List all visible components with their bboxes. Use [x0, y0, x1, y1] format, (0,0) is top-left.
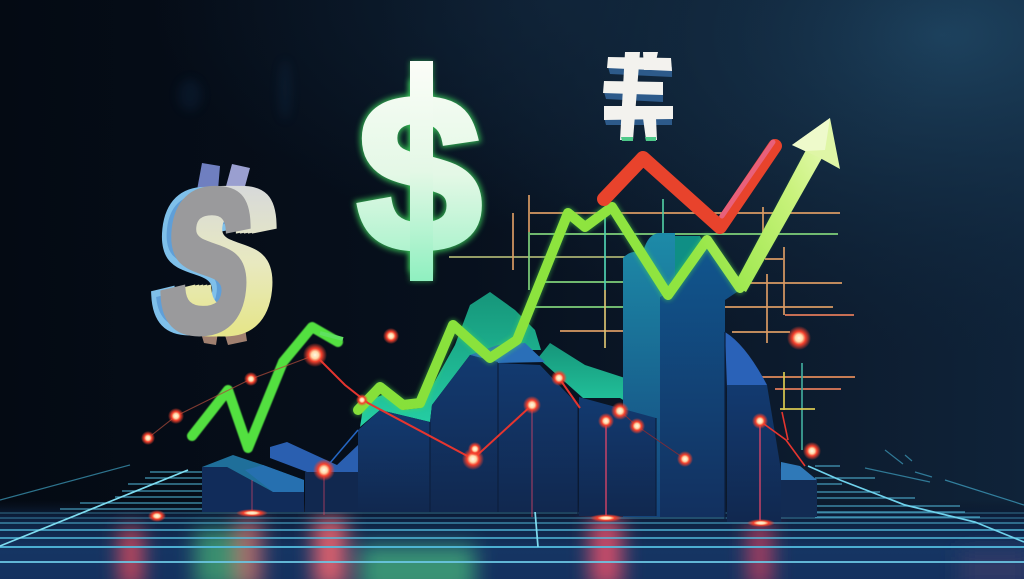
stepped bar chart [202, 233, 817, 522]
floor reflections [120, 518, 1024, 579]
perspective lines left [60, 472, 202, 509]
red data line [148, 355, 805, 523]
dollar sign: large glowing: $ [358, 50, 482, 298]
tall bar [623, 233, 740, 517]
dollar sign: metallic 3D: S [141, 150, 253, 374]
mountain area [360, 292, 541, 427]
red trend line [604, 142, 775, 227]
dollar sign: metallic 3D: S [165, 150, 277, 374]
dollar sign: metallic 3D: S [173, 150, 285, 374]
arrowhead [792, 118, 840, 169]
currency prongs [197, 163, 250, 345]
dollar sign: metallic 3D: S [169, 150, 281, 374]
grid lines behind chart [449, 195, 855, 450]
bars [358, 410, 430, 512]
right light top [725, 332, 767, 388]
dollar sign: metallic 3D: S [177, 150, 289, 374]
perspective lines right [815, 466, 980, 517]
glowing data points [141, 326, 821, 527]
dollar sign: metallic 3D: S [161, 150, 273, 374]
main green trend line with arrow [358, 118, 840, 410]
currency symbol: double-bar [603, 52, 673, 141]
floor with neon grid [0, 450, 1024, 579]
dollar sign: metallic 3D: S [151, 150, 263, 374]
dollar sign: large glowing: $ [358, 50, 482, 298]
left green trend line [192, 327, 343, 448]
